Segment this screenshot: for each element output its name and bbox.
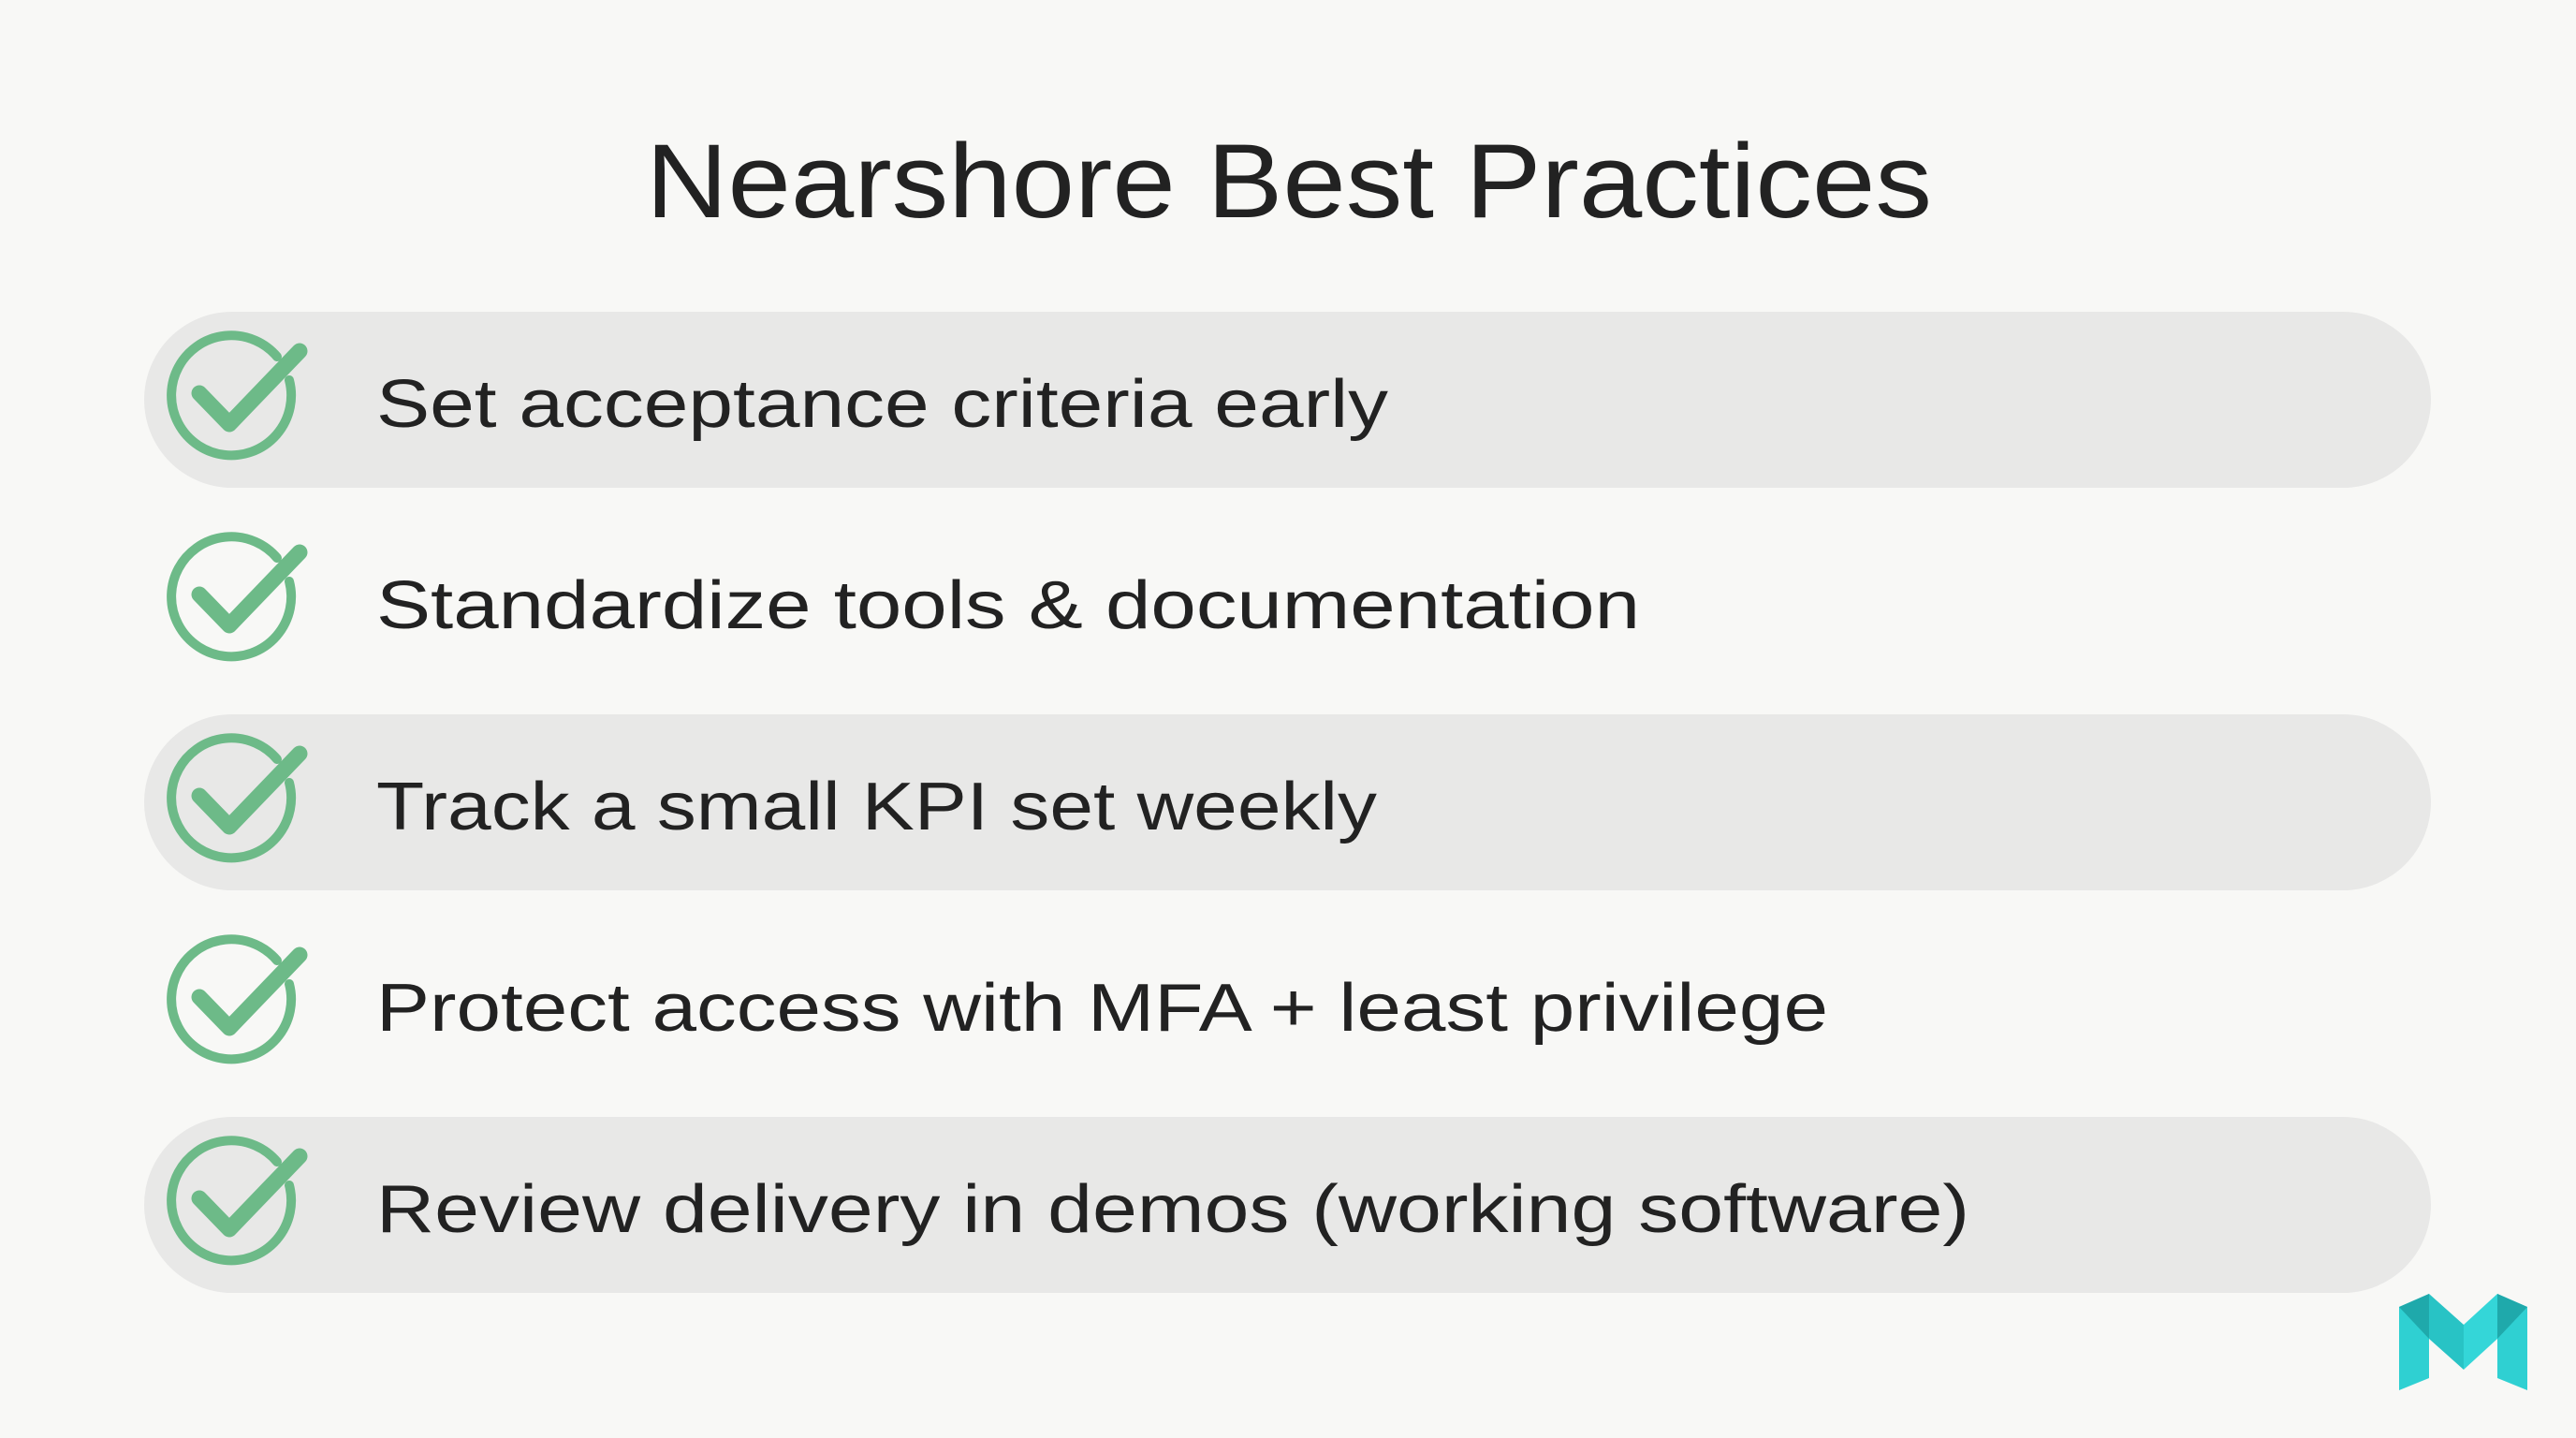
title: Nearshore Best Practices <box>646 123 1932 240</box>
icon: check 2 <box>171 536 300 656</box>
item 1 <box>171 335 1388 455</box>
icon: check 3 <box>171 738 300 858</box>
pill: row 3 <box>144 714 2431 890</box>
text 2: Standardize tools & documentation <box>376 568 1640 643</box>
item 3 <box>171 738 1377 858</box>
text 3: Track a small KPI set weekly <box>376 770 1377 844</box>
icon: check 5 <box>171 1140 300 1260</box>
pill: row 1 <box>144 312 2431 488</box>
icon: check 1 <box>171 335 300 455</box>
logo: M <box>2399 1294 2527 1390</box>
item 4 <box>171 939 1828 1059</box>
text 4: Protect access with MFA + least privilege <box>376 971 1828 1046</box>
item 5 <box>171 1140 1969 1260</box>
icon: check 4 <box>171 939 300 1059</box>
text 5: Review delivery in demos (working software) <box>376 1172 1969 1247</box>
pill: row 5 <box>144 1117 2431 1293</box>
item 2 <box>171 536 1640 656</box>
text 1: Set acceptance criteria early <box>376 367 1388 442</box>
